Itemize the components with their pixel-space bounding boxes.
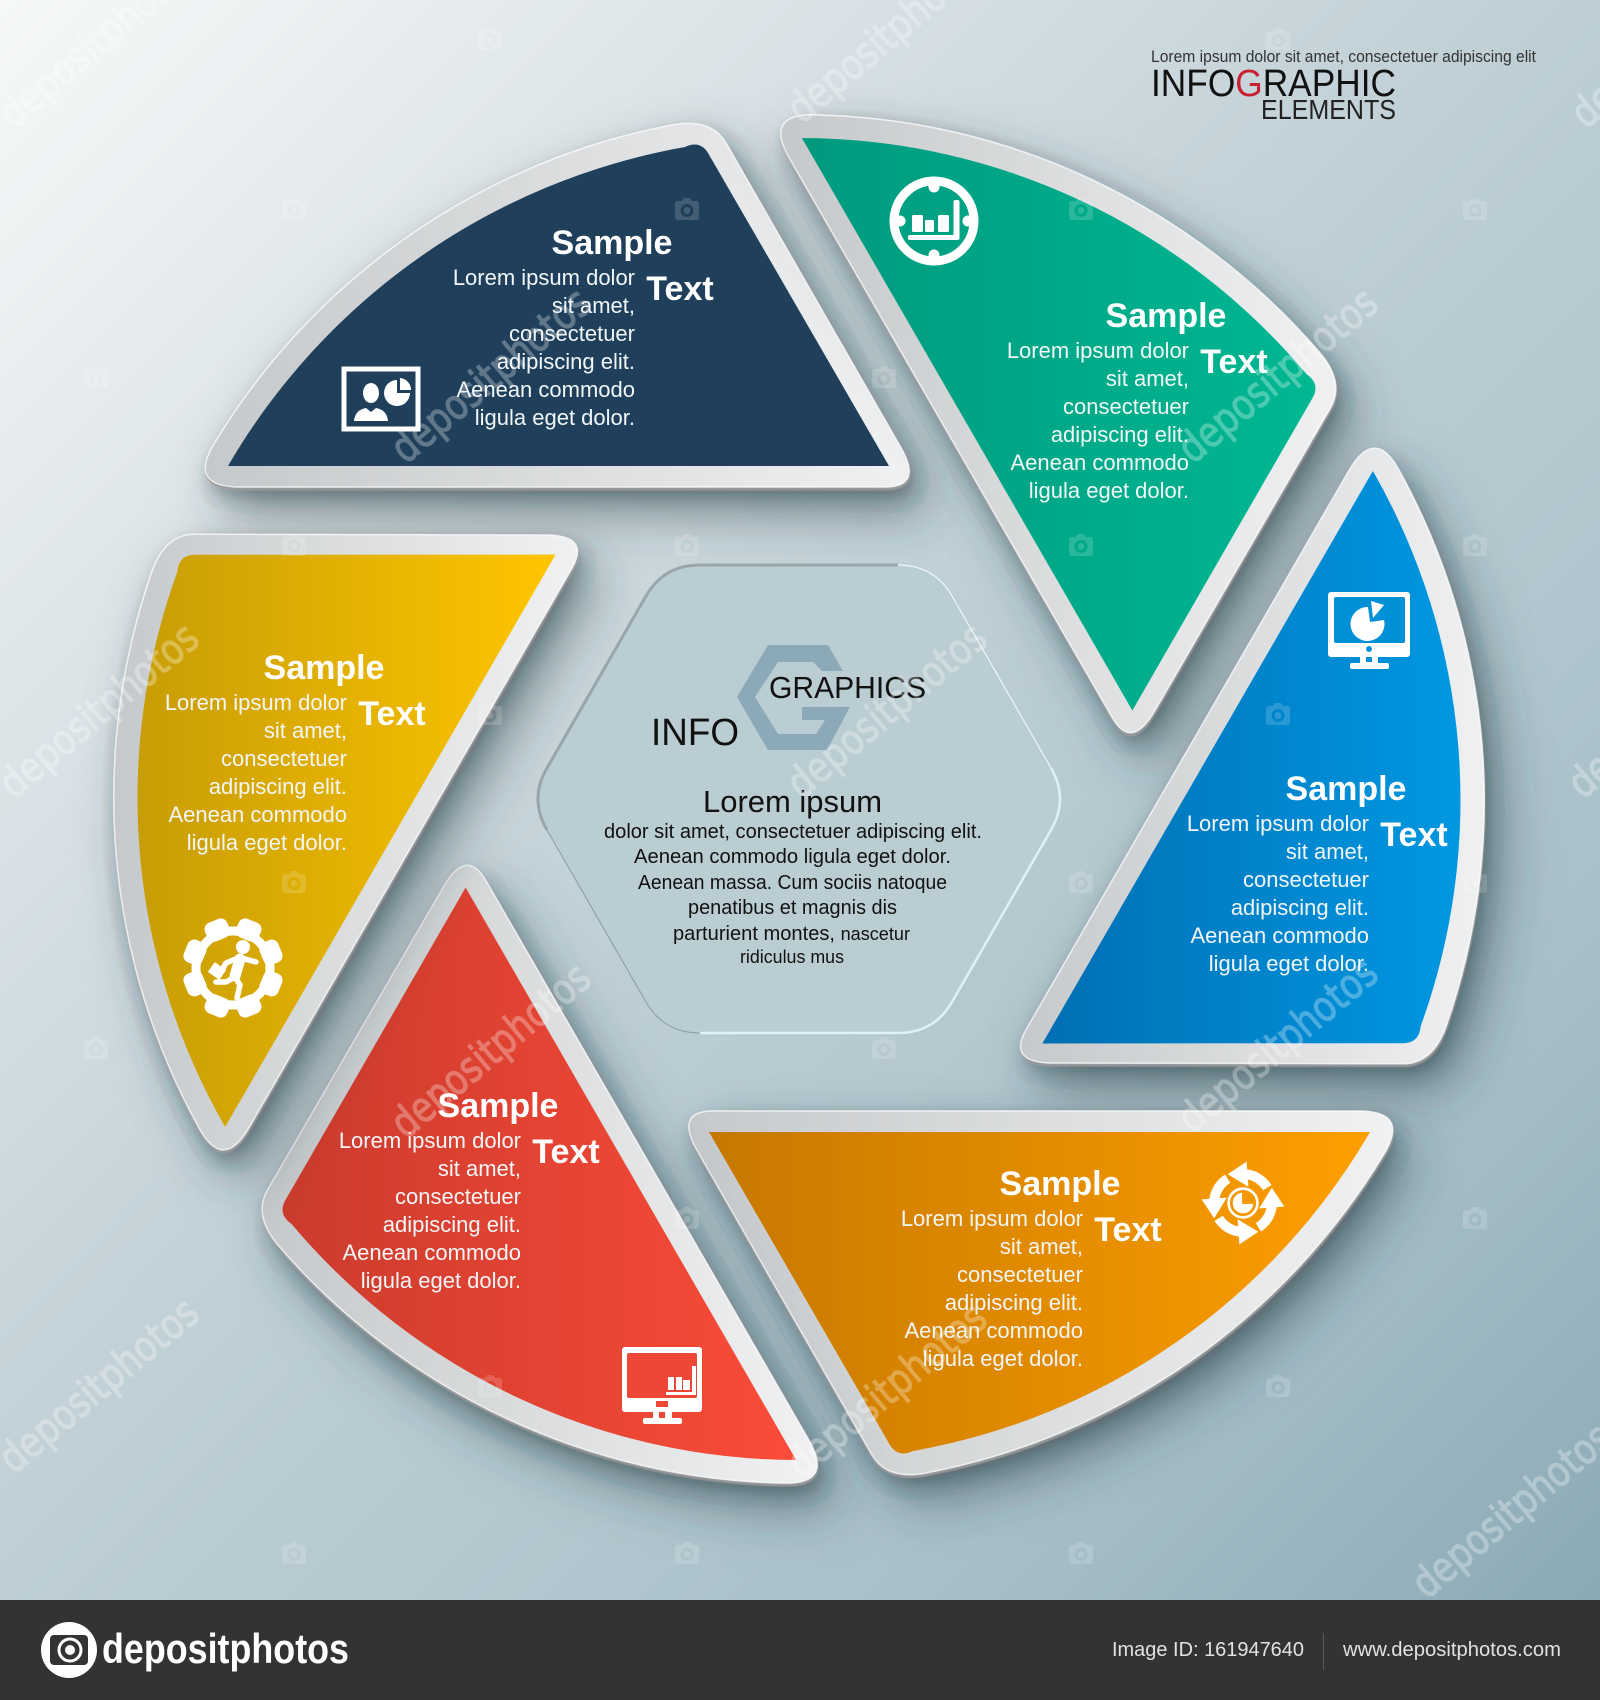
watermarks: depositphotos	[1168, 278, 1387, 473]
text block: consectetuer	[221, 746, 347, 771]
icon: monitor with pie chart	[1328, 592, 1410, 669]
header title block	[1151, 47, 1536, 125]
watermarks: depositphotos	[777, 613, 996, 808]
text block: sit amet,	[552, 293, 635, 318]
heading: sample text	[438, 1087, 600, 1171]
text block: ligula eget dolor.	[923, 1346, 1083, 1371]
text block: Aenean commodo	[1010, 450, 1189, 475]
heading: sample text	[264, 649, 426, 733]
header title block: ELEMENTS	[1261, 94, 1396, 125]
text block: Aenean commodo	[456, 377, 635, 402]
panel: center hexagon	[538, 565, 1060, 1033]
header title block: INFOGRAPHIC	[1151, 63, 1396, 105]
text block: Aenean commodo	[168, 802, 347, 827]
heading: sample text: Sample	[264, 649, 384, 687]
center heading: Lorem ipsum	[703, 784, 882, 819]
icon: chart in ring	[894, 181, 974, 261]
heading: sample text: Text	[1200, 343, 1268, 381]
icon: monitor with bars	[622, 1347, 702, 1424]
text block: ligula eget dolor.	[1029, 478, 1189, 503]
text block: adipiscing elit.	[383, 1212, 521, 1237]
heading: sample text: Text	[358, 695, 426, 733]
header title block: Lorem ipsum dolor sit amet, consectetuer adipiscing elit	[1151, 47, 1536, 66]
text block: consectetuer	[1063, 394, 1189, 419]
heading: sample text: Text	[646, 270, 714, 308]
heading: sample text	[1000, 1165, 1162, 1249]
footer logo: depositphotos	[102, 1625, 349, 1672]
center text block: penatibus et magnis dis	[688, 897, 897, 919]
icon: cycle arrows with clock	[1202, 1162, 1284, 1244]
center text block: ridiculus mus	[740, 947, 844, 967]
heading: sample text: Sample	[1286, 770, 1406, 808]
text block: adipiscing elit.	[497, 349, 635, 374]
center text block: parturient montes, nascetur	[673, 923, 910, 945]
text block: adipiscing elit.	[209, 774, 347, 799]
text block: Aenean commodo	[1190, 923, 1369, 948]
text block: Lorem ipsum dolor	[453, 265, 635, 290]
text block: Lorem ipsum dolor	[165, 690, 347, 715]
text block: Lorem ipsum dolor	[339, 1128, 521, 1153]
panel: yellow segment	[0, 366, 584, 1157]
text block: ligula eget dolor.	[187, 830, 347, 855]
text block: sit amet,	[1106, 366, 1189, 391]
center text block: Aenean commodo ligula eget dolor.	[634, 846, 951, 868]
heading: sample text: Text	[1094, 1211, 1162, 1249]
heading: sample text	[1106, 297, 1268, 381]
text block: adipiscing elit.	[1051, 422, 1189, 447]
footer banner	[0, 1600, 1600, 1700]
text block: sit amet,	[1000, 1234, 1083, 1259]
text block: consectetuer	[509, 321, 635, 346]
text block: Aenean commodo	[904, 1318, 1083, 1343]
footer logo	[41, 1622, 349, 1678]
panel: blue segment	[1014, 441, 1600, 1232]
text block: sit amet,	[438, 1156, 521, 1181]
heading: sample text: Sample	[1106, 297, 1226, 335]
icon: hexagonal G logo	[737, 645, 850, 750]
heading: sample text: Sample	[438, 1087, 558, 1125]
watermarks: depositphotos	[381, 278, 600, 473]
text block: Aenean commodo	[342, 1240, 521, 1265]
text block: ligula eget dolor.	[475, 405, 635, 430]
icon: presenter tablet	[344, 369, 418, 429]
panel: navy segment	[205, 123, 909, 487]
logo word: graphics: GRAPHICS	[769, 670, 926, 705]
heading: sample text: Text	[532, 1133, 600, 1171]
text block: Lorem ipsum dolor	[1007, 338, 1189, 363]
text block: consectetuer	[1243, 867, 1369, 892]
icon: gear with runner	[181, 916, 285, 1020]
panel: green segment	[772, 0, 1439, 738]
text block: ligula eget dolor.	[1209, 951, 1369, 976]
website: www.depositphotos.com	[1342, 1639, 1561, 1661]
watermarks: depositphotos	[777, 1293, 996, 1488]
text block: Lorem ipsum dolor	[901, 1206, 1083, 1231]
heading: sample text: Sample	[1000, 1165, 1120, 1203]
heading: sample text	[552, 224, 714, 308]
panel: red segment	[159, 860, 826, 1651]
text block: sit amet,	[1286, 839, 1369, 864]
text block: consectetuer	[957, 1262, 1083, 1287]
logo word: info: INFO	[651, 712, 739, 754]
center text block	[604, 821, 982, 967]
panel: orange segment	[689, 1111, 1393, 1475]
text block: Lorem ipsum dolor	[1187, 811, 1369, 836]
watermarks: depositphotos	[381, 953, 600, 1148]
text block: consectetuer	[395, 1184, 521, 1209]
text block: sit amet,	[264, 718, 347, 743]
image id: Image ID: 161947640	[1112, 1639, 1304, 1661]
heading: sample text: Sample	[552, 224, 672, 262]
heading: sample text: Text	[1380, 816, 1448, 854]
heading: sample text	[1286, 770, 1448, 854]
text block: ligula eget dolor.	[361, 1268, 521, 1293]
text block: adipiscing elit.	[1231, 895, 1369, 920]
watermarks: depositphotos	[1168, 948, 1387, 1143]
center text block: dolor sit amet, consectetuer adipiscing elit.	[604, 821, 982, 843]
center text block: Aenean massa. Cum sociis natoque	[638, 872, 947, 894]
text block: adipiscing elit.	[945, 1290, 1083, 1315]
